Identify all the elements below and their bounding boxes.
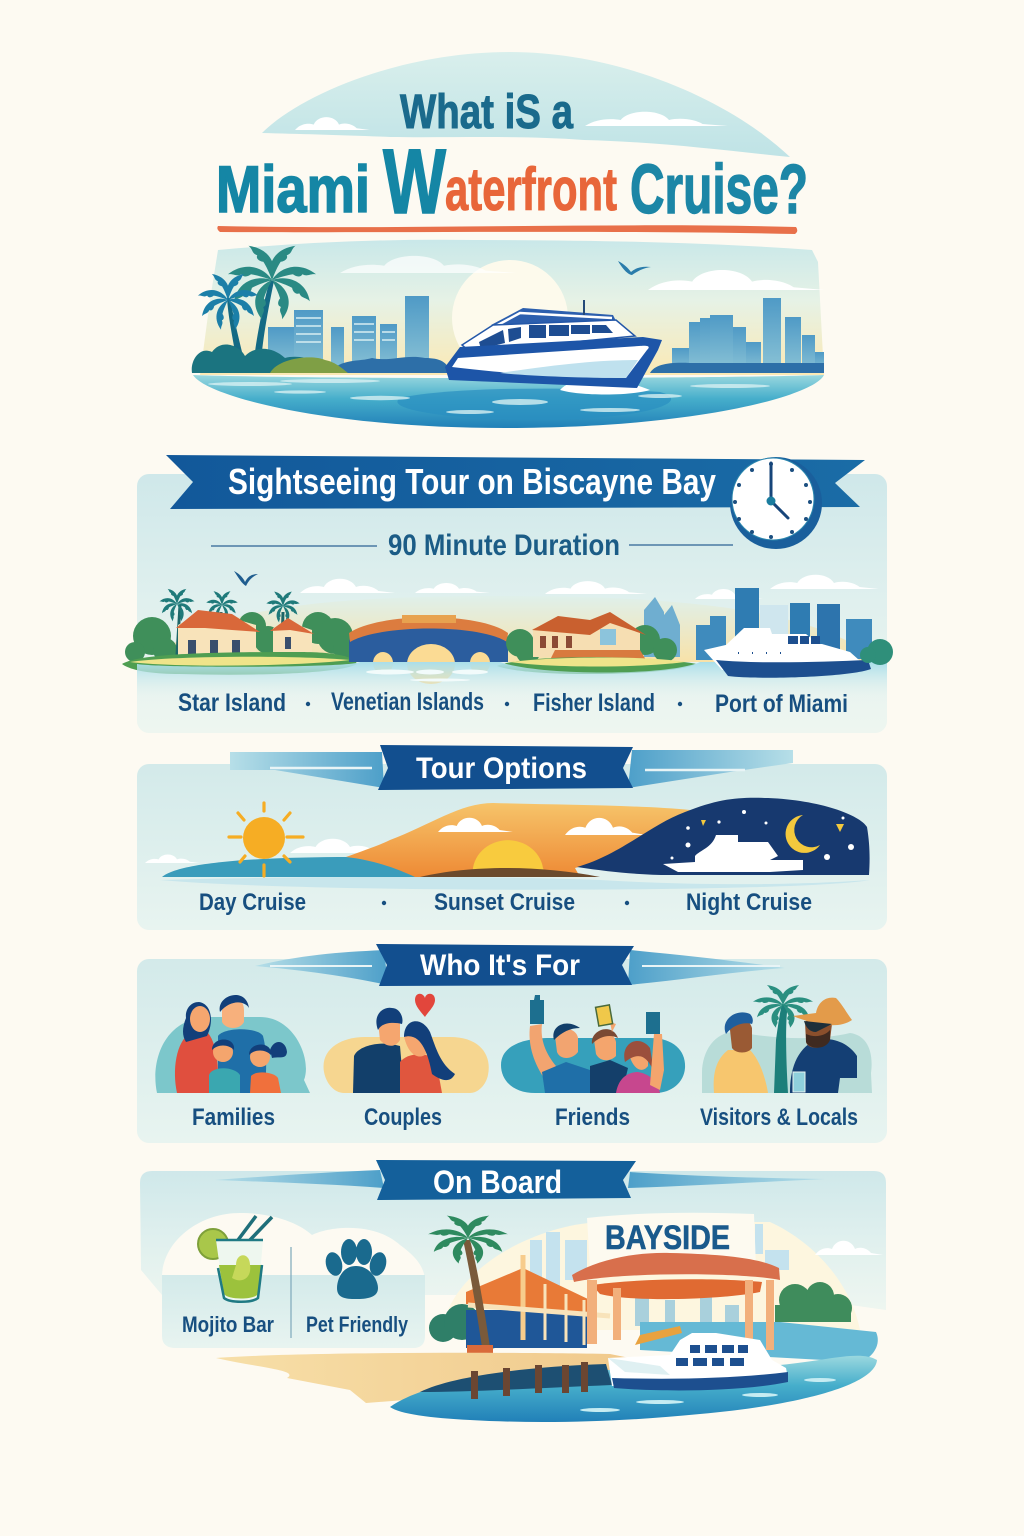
island: fisher island — [497, 657, 697, 674]
title line two — [216, 131, 808, 233]
route scene — [122, 571, 893, 700]
background towers — [530, 1224, 789, 1300]
group: families — [155, 995, 310, 1093]
bay water — [390, 1356, 877, 1422]
hero sun — [452, 260, 568, 376]
water: bay — [137, 662, 887, 700]
route labels: Port of Miami — [715, 690, 848, 718]
panel: on board — [140, 1160, 886, 1422]
ribbon streaks — [230, 750, 793, 788]
group labels: Couples — [364, 1104, 442, 1131]
title line two: Miami — [216, 152, 370, 226]
hero sky — [200, 240, 824, 375]
boat roof — [491, 308, 616, 325]
heading text: Sightseeing Tour on Biscayne Bay — [228, 461, 716, 502]
heading ribbon — [166, 455, 865, 509]
group labels: Families — [192, 1104, 275, 1131]
icon: clock — [730, 457, 822, 549]
island foliage — [192, 344, 348, 373]
ripples: bay — [366, 670, 488, 682]
panel background — [137, 959, 887, 1143]
amenity labels — [182, 1312, 409, 1337]
left skyline — [268, 296, 429, 373]
horizon wash — [160, 877, 870, 890]
canopy — [572, 1253, 780, 1350]
palm crowns — [198, 241, 316, 330]
boat cabin — [462, 320, 635, 352]
boat windows — [479, 325, 613, 349]
left tree line — [330, 357, 450, 373]
right tree line — [650, 363, 824, 373]
houses: star island — [176, 610, 314, 656]
amenity labels: Mojito Bar — [182, 1312, 274, 1337]
group labels — [192, 1104, 858, 1131]
right skyline — [672, 298, 824, 373]
option labels — [199, 889, 812, 916]
sign: Bayside — [587, 1213, 756, 1268]
group labels: Friends — [555, 1104, 630, 1131]
route labels: Star Island — [178, 689, 286, 717]
house: fisher island — [532, 612, 646, 660]
heading ribbon — [378, 745, 633, 790]
hero clouds — [340, 256, 825, 290]
foliage: fisher island — [506, 625, 677, 664]
option labels: Night Cruise — [686, 889, 812, 916]
group: couples — [323, 994, 489, 1093]
cruise boat — [445, 300, 662, 394]
island: star island — [122, 652, 357, 675]
icon: paw print — [323, 1239, 389, 1299]
amenity card — [162, 1213, 425, 1348]
deep water patch — [397, 389, 671, 420]
title line two: aterfront — [445, 156, 617, 223]
bayside marina scene — [216, 1212, 883, 1422]
group labels: Visitors & Locals — [700, 1104, 858, 1131]
scene clouds — [300, 575, 879, 599]
scene glow — [448, 1222, 860, 1330]
option labels: Sunset Cruise — [434, 889, 575, 916]
title sky dome — [262, 52, 790, 157]
night cruise illustration — [577, 798, 870, 875]
water — [193, 375, 824, 428]
route labels: Fisher Island — [533, 689, 655, 717]
panel: tour options — [137, 745, 887, 930]
route labels: Venetian Islands — [331, 688, 484, 716]
icon: seagull — [618, 261, 651, 275]
heading text: Who It's For — [420, 949, 580, 982]
harbor water band — [640, 1322, 878, 1362]
boat wake — [560, 382, 650, 394]
skyline: port of Miami — [644, 588, 872, 660]
card domes — [162, 1213, 425, 1340]
title clouds — [295, 112, 728, 130]
icon: bird — [234, 571, 258, 586]
foliage: port — [860, 639, 893, 665]
ribbon streaks — [255, 950, 785, 985]
scene glow — [150, 596, 880, 662]
palm — [428, 1212, 508, 1353]
title line two: W — [383, 131, 446, 233]
bridge: venetian islands — [349, 615, 508, 684]
panel: sightseeing tour — [122, 455, 893, 733]
option labels: Day Cruise — [199, 889, 306, 916]
pier pilings — [471, 1362, 588, 1399]
panel background — [137, 764, 887, 930]
foliage: star island — [125, 612, 357, 662]
water ripples — [208, 379, 770, 414]
panel sky — [140, 1171, 886, 1310]
heading text: Tour Options — [416, 752, 587, 785]
icon: mojito — [198, 1216, 272, 1302]
hero scene: cruise boat and skyline — [192, 240, 825, 428]
divider — [290, 1247, 292, 1338]
boat hull — [445, 337, 662, 388]
palms: star island — [159, 587, 300, 655]
day cruise illustration — [145, 803, 420, 877]
title line one: What iS a — [400, 86, 573, 139]
heading ribbon — [376, 944, 634, 986]
panel: who it's for — [137, 944, 887, 1143]
distant skyline — [635, 1294, 739, 1326]
bush: right — [775, 1282, 852, 1322]
title underline — [217, 225, 797, 234]
ship: port of Miami — [704, 628, 871, 678]
duration label: 90 Minute Duration — [388, 529, 620, 562]
amenity labels: Pet Friendly — [306, 1312, 409, 1337]
panel background — [137, 474, 887, 733]
sign: Bayside: BAYSIDE — [605, 1219, 730, 1257]
heading ribbon — [376, 1160, 636, 1200]
sand — [216, 1353, 660, 1403]
marina building — [466, 1255, 610, 1348]
title line two: Cruise? — [630, 150, 808, 228]
palm trunks — [227, 280, 274, 352]
group: visitors and locals — [702, 982, 872, 1093]
ribbon streaks — [215, 1170, 825, 1188]
bush: left — [429, 1304, 518, 1349]
cloud — [815, 1241, 883, 1255]
card base — [162, 1275, 425, 1348]
heading text: On Board — [433, 1164, 562, 1200]
shore shadow — [420, 1364, 612, 1392]
route labels — [178, 688, 848, 718]
water ripples — [580, 1378, 836, 1412]
title block — [216, 52, 808, 234]
group: friends — [501, 995, 685, 1093]
sunset cruise illustration — [346, 803, 690, 877]
docked boat — [608, 1333, 788, 1390]
